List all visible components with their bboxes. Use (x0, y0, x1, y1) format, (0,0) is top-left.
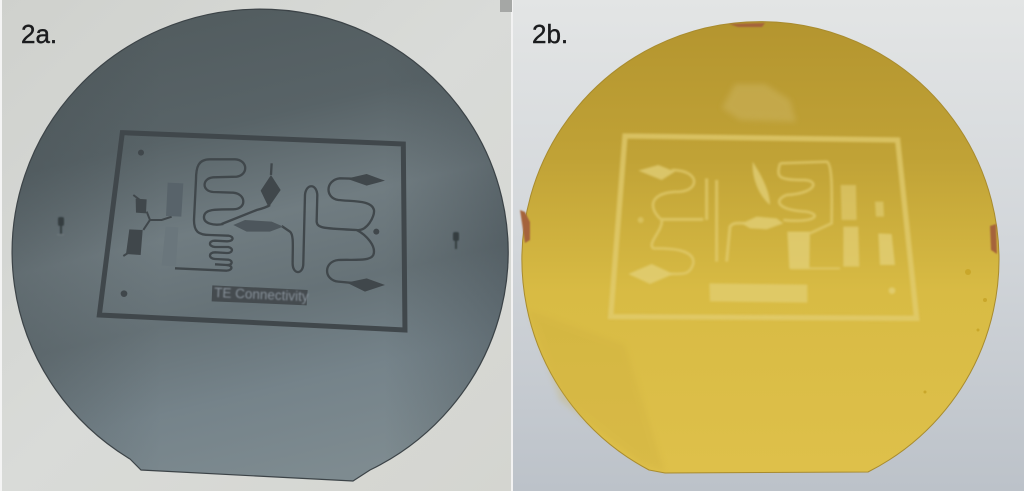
label plate (212, 285, 308, 305)
top right diamond (347, 174, 385, 186)
alignment mark right (453, 232, 459, 249)
diagonal link and right channels (222, 163, 374, 272)
serpentine channel (194, 159, 245, 265)
shadow fold at bottom left (528, 310, 665, 472)
upper chamber (753, 162, 770, 205)
yellow specks (924, 269, 987, 394)
wafer 2a: grey wafer with dark circuit (12, 9, 508, 481)
horizontal chamber (742, 217, 783, 229)
right photo background (512, 0, 1024, 491)
chip label text: TE Connectivity (214, 285, 309, 304)
circuit pattern 2b (611, 136, 917, 318)
wafer 2b: yellow wafer with pale circuit (520, 22, 999, 473)
alignment mark left (57, 217, 64, 236)
outer frame (611, 136, 917, 318)
chamber diamond (261, 175, 281, 207)
label 2b: 2b. (532, 19, 568, 49)
chamber horizontal (233, 220, 283, 232)
pale patch near top (722, 84, 796, 122)
bottom right diamond (347, 278, 385, 292)
label 2a: 2a. (21, 19, 57, 49)
outer frame (99, 133, 405, 330)
left photo background (0, 0, 512, 491)
top left diamond (638, 165, 675, 180)
rust edge marks (520, 23, 997, 254)
serpentine channels (652, 170, 694, 274)
circuit pattern 2a (99, 133, 405, 330)
label plate (709, 283, 807, 303)
pads (136, 199, 147, 213)
pads (787, 232, 810, 268)
left Y channels and electrodes (123, 195, 172, 256)
bottom left diamond (628, 264, 673, 284)
